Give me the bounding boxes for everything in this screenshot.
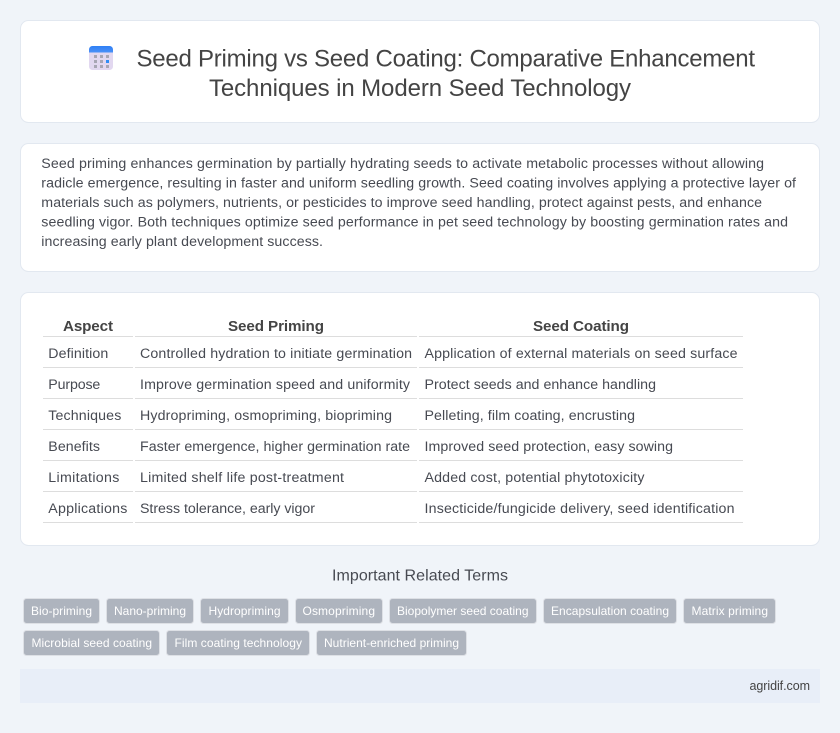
- tag: Nano-priming: Nano-priming: [114, 604, 186, 618]
- tag: Bio-priming: [24, 598, 100, 624]
- row: techniques: [48, 408, 635, 424]
- row: techniques: Pelleting, film coating, encrusting: [424, 408, 635, 424]
- icon: calendar: [89, 46, 113, 70]
- row: benefits: [48, 439, 673, 455]
- tag: Biopolymer seed coating: [390, 598, 536, 624]
- row: limitations: [48, 470, 645, 486]
- row: purpose: [48, 377, 656, 393]
- text block: description paragraph: radicle emergence, resulting in faster and uniform seedling growth. Seed coating involves applying a protective layer of: [41, 176, 796, 192]
- tag: Film coating technology: Film coating technology: [174, 636, 302, 650]
- text block: description paragraph: seedling vigor. Both techniques optimize seed performance in pet seed technology by boosting germination rates and: [41, 215, 788, 231]
- table header: Seed Priming: [228, 318, 324, 335]
- text block: description paragraph: Seed priming enhances germination by partially hydrating seeds to activate metabolic processes without allowing: [41, 156, 764, 172]
- tag group: related terms: [24, 598, 776, 656]
- row: techniques: Techniques: [48, 408, 121, 424]
- tag: Film coating technology: [166, 630, 310, 656]
- row: benefits: Benefits: [48, 439, 100, 455]
- table header: [63, 318, 629, 335]
- footer bar: [20, 669, 820, 703]
- row: purpose: Purpose: [48, 377, 100, 393]
- tag: Encapsulation coating: [544, 598, 676, 624]
- row: definition: Controlled hydration to initiate germination: [140, 346, 412, 362]
- row: purpose: Improve germination speed and uniformity: [140, 377, 411, 393]
- row: applications: Insecticide/fungicide delivery, seed identification: [424, 501, 734, 517]
- text block: description paragraph: materials such as polymers, nutrients, or pesticides to improve seed handling, protect against pests, and enhance: [41, 195, 762, 211]
- row: limitations: Added cost, potential phytotoxicity: [424, 470, 645, 486]
- tag: Encapsulation coating: Encapsulation coating: [551, 604, 669, 618]
- row: definition: Application of external materials on seed surface: [424, 346, 738, 362]
- text block: description paragraph: increasing early plant development success.: [41, 234, 323, 250]
- tag: Hydropriming: [200, 598, 288, 624]
- row: applications: Stress tolerance, early vigor: [140, 501, 315, 517]
- title: Techniques in Modern Seed Technology: [209, 75, 631, 102]
- tag: Matrix priming: Matrix priming: [692, 604, 768, 618]
- text block: description paragraph: [41, 156, 796, 250]
- row: definition: [48, 346, 738, 362]
- heading: important related terms: Important Related Terms: [332, 568, 508, 585]
- row: techniques: Hydropriming, osmopriming, biopriming: [140, 408, 392, 424]
- tag: Biopolymer seed coating: Biopolymer seed coating: [397, 604, 528, 618]
- title: Seed Priming vs Seed Coating: Comparative Enhancement: [136, 46, 755, 72]
- row: benefits: Faster emergence, higher germination rate: [140, 439, 410, 455]
- row: applications: [48, 501, 735, 517]
- tag: Osmopriming: Osmopriming: [302, 604, 375, 618]
- tag: Hydropriming: Hydropriming: [208, 604, 280, 618]
- tag: Matrix priming: [684, 598, 776, 624]
- row: limitations: Limited shelf life post-treatment: [140, 470, 344, 486]
- tag: Nutrient-enriched priming: Nutrient-enriched priming: [324, 636, 459, 650]
- row: purpose: Protect seeds and enhance handling: [424, 377, 656, 393]
- tag: Nutrient-enriched priming: [316, 630, 466, 656]
- tag: Bio-priming: Bio-priming: [31, 604, 92, 618]
- tag: Microbial seed coating: [24, 630, 160, 656]
- row: definition: Definition: [48, 346, 108, 362]
- tag: Microbial seed coating: Microbial seed coating: [32, 636, 152, 650]
- tag: Osmopriming: [296, 598, 382, 624]
- tag: Nano-priming: [106, 598, 194, 624]
- panel: description: [20, 144, 820, 272]
- panel: title header: [20, 20, 820, 122]
- row: benefits: Improved seed protection, easy sowing: [424, 439, 673, 455]
- footer source text: agridif.com: [750, 679, 810, 693]
- table header: Seed Coating: [533, 318, 629, 335]
- row: applications: Applications: [48, 501, 127, 517]
- title: [136, 46, 755, 102]
- row: limitations: Limitations: [48, 470, 119, 486]
- panel: comparison table: [20, 292, 820, 546]
- table header: Aspect: [63, 318, 113, 335]
